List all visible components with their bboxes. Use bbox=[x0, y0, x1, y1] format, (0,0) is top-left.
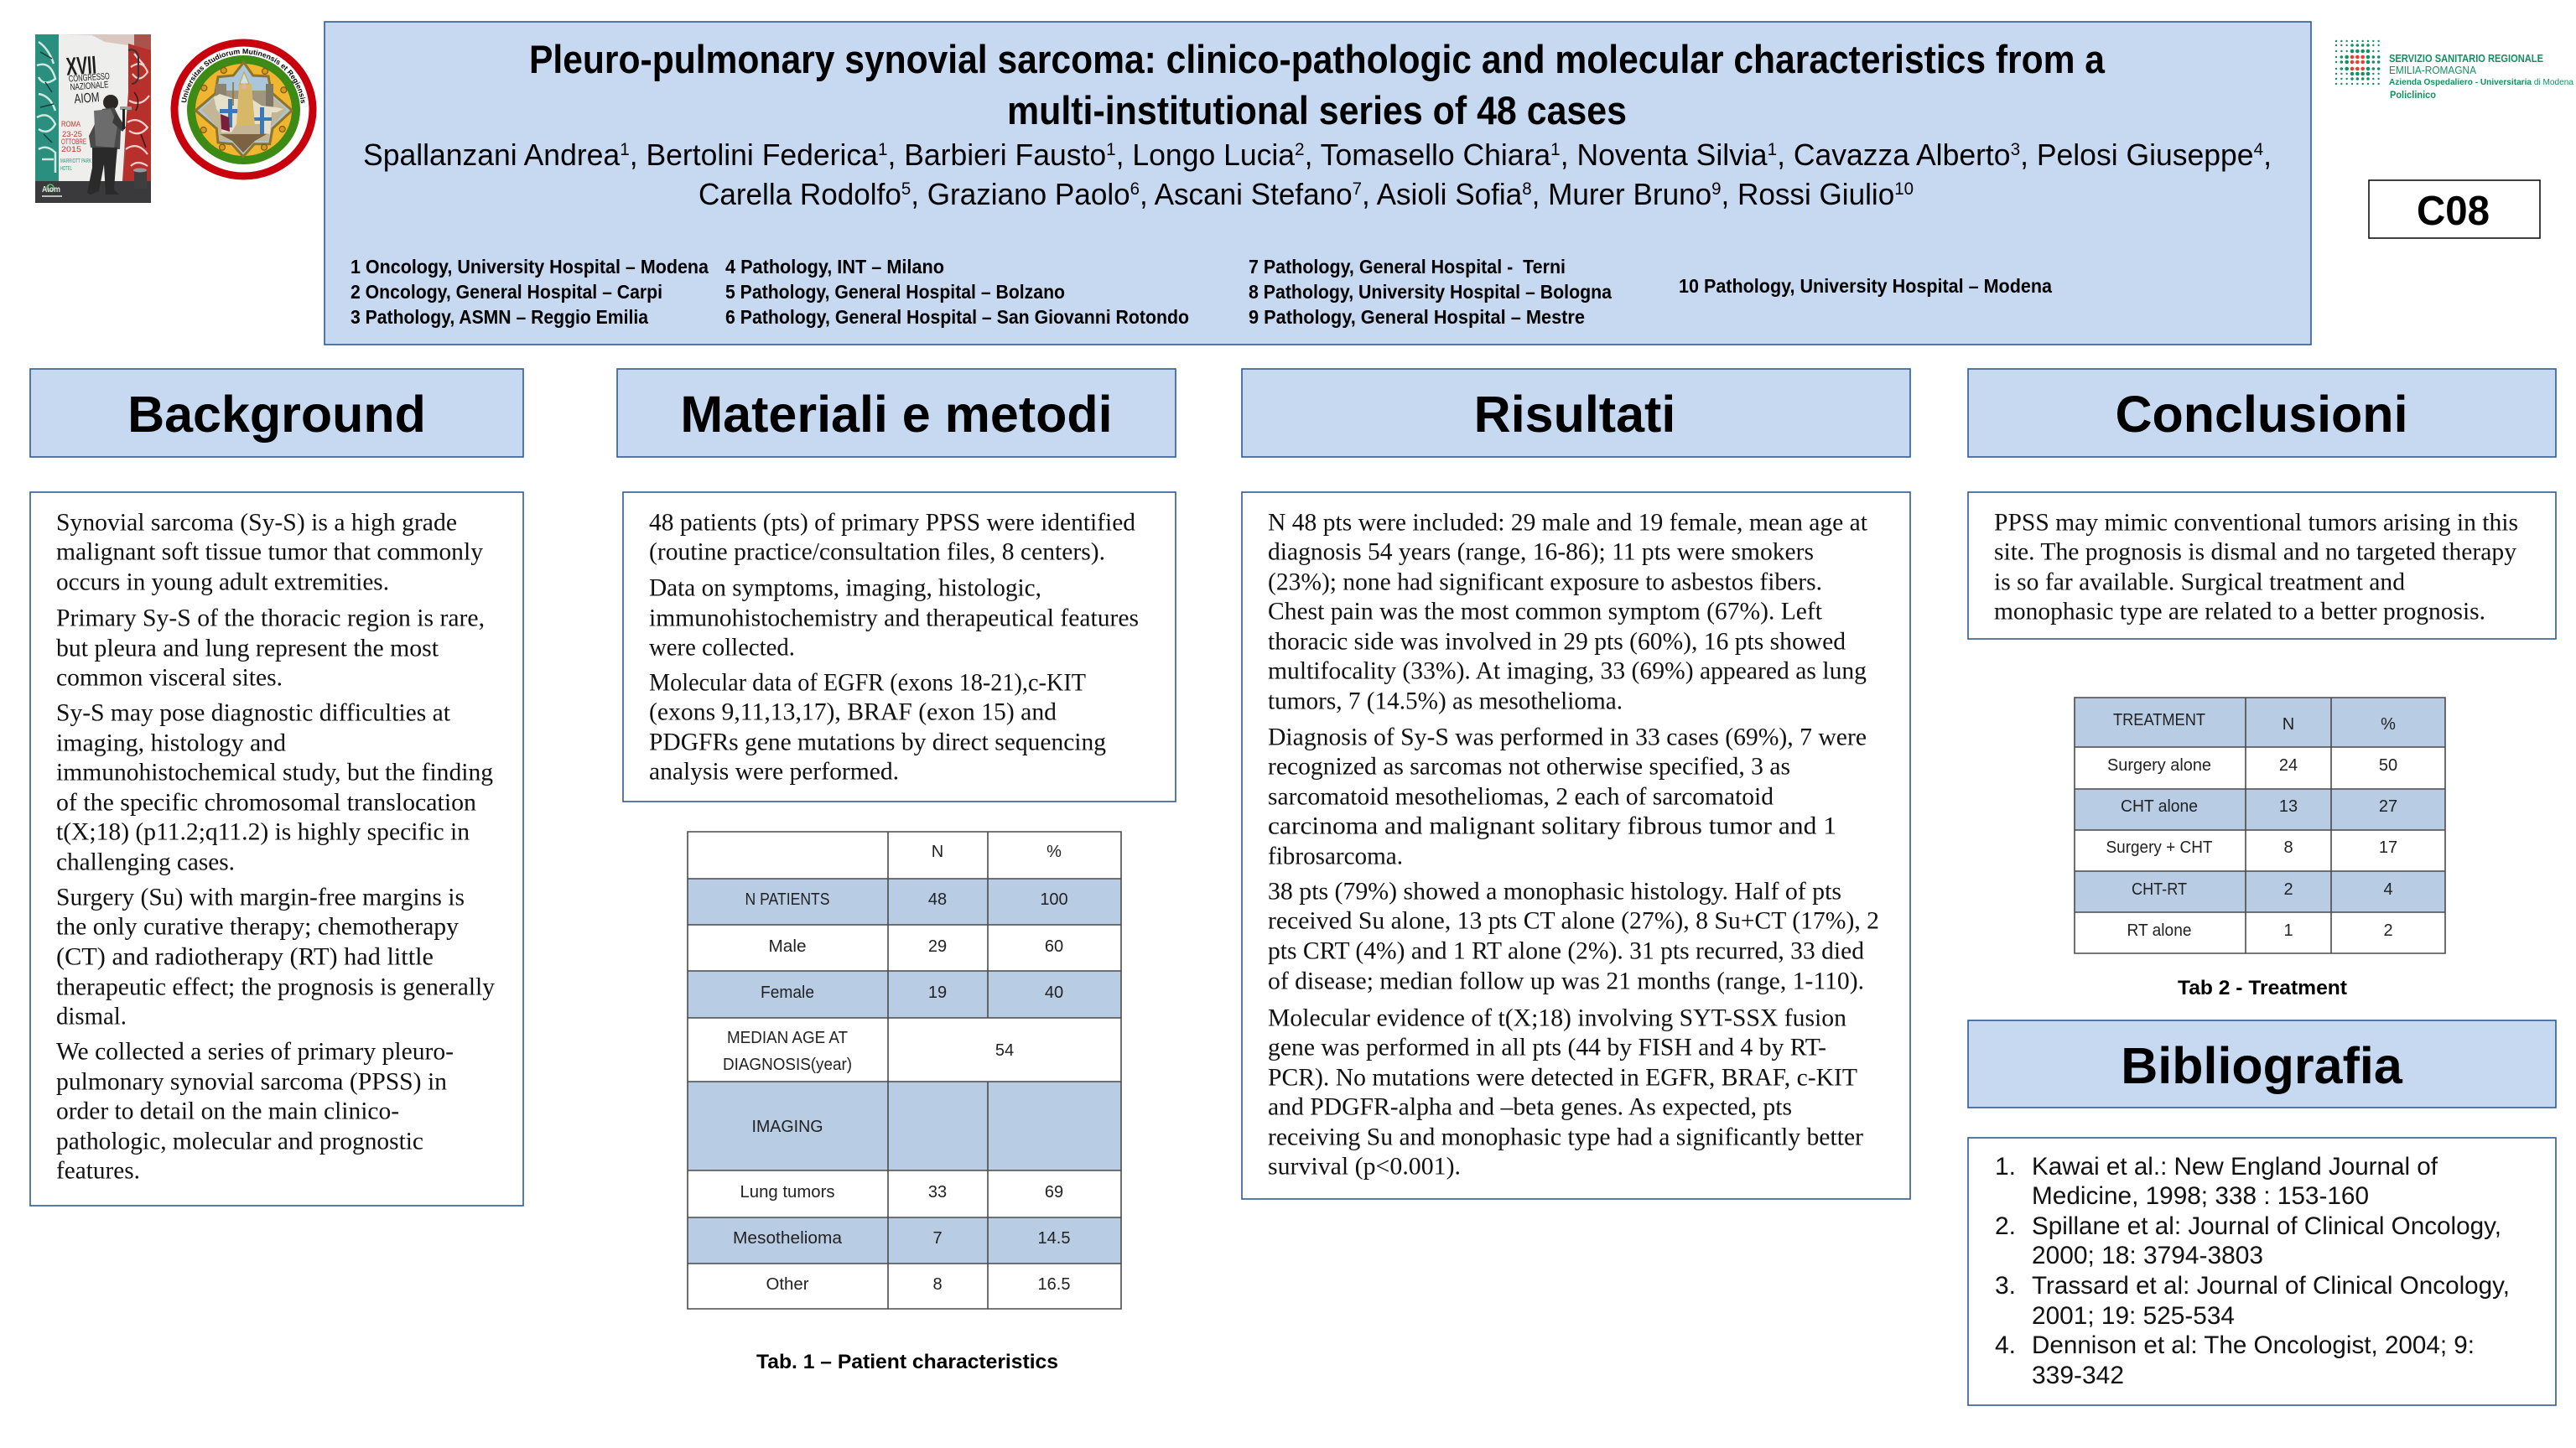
logo: university seal bbox=[171, 39, 317, 179]
heading: Bibliografia: Bibliografia bbox=[2121, 1037, 2403, 1094]
logo: Servizio Sanitario Regionale: Azienda Ospedaliero - Universitaria di Modena bbox=[2389, 77, 2573, 87]
panel: Background text: Primary Sy-S of the thoracic region is rare, bbox=[56, 604, 485, 632]
panel: Risultati text: recognized as sarcomas not otherwise specified, 3 as bbox=[1268, 753, 1790, 780]
authors: 1 bbox=[620, 140, 630, 159]
logo: congress poster: OTTOBRE bbox=[61, 138, 86, 146]
quatrefoil emblem bbox=[195, 62, 292, 157]
table 1: patient characteristics: 7 bbox=[932, 1229, 943, 1248]
affiliations: 4 Pathology, INT – Milano bbox=[725, 256, 944, 278]
panel: Conclusioni text: PPSS may mimic conventional tumors arising in this bbox=[1994, 508, 2518, 537]
panel: Risultati text: Molecular evidence of t(X;18) involving SYT-SSX fusion bbox=[1268, 1004, 1846, 1031]
panel: Materiali e metodi text: were collected. bbox=[649, 634, 795, 661]
panel: Background text bbox=[30, 492, 523, 1206]
table 2: treatment: 2 bbox=[2283, 880, 2293, 899]
authors: , Longo Lucia bbox=[1116, 138, 1296, 172]
panel: Risultati text: sarcomatoid mesotheliomas, 2 each of sarcomatoid bbox=[1268, 783, 1774, 810]
panel: Conclusioni text: site. The prognosis is dismal and no targeted therapy bbox=[1994, 538, 2516, 565]
panel: Bibliografia references: 339-342 bbox=[2032, 1362, 2124, 1389]
panel: Background text: common visceral sites. bbox=[56, 664, 283, 691]
heading: Conclusioni: Conclusioni bbox=[2115, 386, 2408, 443]
table 2: treatment: 2 bbox=[2383, 921, 2393, 940]
logo: congress poster: HOTEL bbox=[60, 166, 72, 172]
table 2: treatment: 50 bbox=[2379, 756, 2397, 775]
panel: Background text: Surgery (Su) with margin-free margins is bbox=[56, 884, 465, 911]
table 1: patient characteristics: 100 bbox=[1040, 890, 1068, 909]
affiliations: 9 Pathology, General Hospital – Mestre bbox=[1249, 306, 1585, 328]
table 1: patient characteristics: Lung tumors bbox=[740, 1183, 835, 1201]
logo: congress poster: 23-25 bbox=[62, 130, 82, 138]
panel: Bibliografia references: Dennison et al: The Oncologist, 2004; 9: bbox=[2032, 1331, 2475, 1359]
panel: Risultati text: of disease; median follow up was 21 months (range, 1-110). bbox=[1268, 968, 1864, 994]
logo: congress poster: NAZIONALE bbox=[70, 80, 109, 93]
logo: congress poster: CONGRESSO bbox=[68, 71, 111, 85]
table 2: treatment: 8 bbox=[2283, 838, 2293, 857]
panel: Background text: We collected a series of primary pleuro- bbox=[56, 1038, 454, 1065]
table 2: treatment: CHT-RT bbox=[2132, 880, 2187, 899]
panel: Background text: therapeutic effect; the prognosis is generally bbox=[56, 973, 495, 1001]
panel: Bibliografia references: 4. bbox=[1995, 1331, 2016, 1359]
panel: Bibliografia references: Medicine, 1998; 338 : 153-160 bbox=[2032, 1182, 2369, 1210]
panel: Bibliografia references: Trassard et al: Journal of Clinical Oncology, bbox=[2032, 1272, 2510, 1300]
panel: Background text: immunohistochemical study, but the finding bbox=[56, 758, 493, 786]
heading: Bibliografia bbox=[1968, 1020, 2556, 1108]
panel: Materiali e metodi text: immunohistochemistry and therapeutical features bbox=[649, 604, 1139, 632]
code box C08 bbox=[2369, 180, 2540, 238]
authors: 1 bbox=[1106, 140, 1116, 159]
panel: Risultati text: Diagnosis of Sy-S was performed in 33 cases (69%), 7 were bbox=[1268, 723, 1867, 751]
panel: Risultati text: pts CRT (4%) and 1 RT alone (2%). 31 pts recurred, 33 died bbox=[1268, 937, 1864, 964]
authors: 5 bbox=[901, 179, 911, 199]
panel: Background text: but pleura and lung represent the most bbox=[56, 634, 439, 662]
authors: , Graziano Paolo bbox=[911, 177, 1130, 211]
table 1: patient characteristics: 54 bbox=[995, 1041, 1014, 1060]
affiliations: 3 Pathology, ASMN – Reggio Emilia bbox=[351, 306, 648, 328]
logo: congress poster: ROMA bbox=[61, 120, 80, 128]
logo: Servizio Sanitario Regionale: Policlinico bbox=[2390, 89, 2436, 101]
authors: 4 bbox=[2254, 140, 2263, 159]
panel: Materiali e metodi text: PDGFRs gene mutations by direct sequencing bbox=[649, 728, 1106, 756]
authors: , Pelosi Giuseppe bbox=[2020, 138, 2254, 172]
panel: Risultati text: (23%); none had significant exposure to asbestos fibers. bbox=[1268, 568, 1822, 595]
panel: Materiali e metodi text bbox=[623, 492, 1176, 802]
logo: university seal: Universitas Studiorum Mutinensis et Regiensis bbox=[181, 49, 305, 104]
table 1: patient characteristics: N PATIENTS bbox=[745, 890, 830, 909]
panel: Bibliografia references: Spillane et al: Journal of Clinical Oncology, bbox=[2032, 1212, 2501, 1240]
authors: , Murer Bruno bbox=[1532, 177, 1711, 211]
table 1: patient characteristics: Female bbox=[761, 983, 814, 1002]
authors: 3 bbox=[2011, 140, 2020, 159]
title: Pleuro-pulmonary synovial sarcoma: clinico-pathologic and molecular characteristics from a bbox=[529, 37, 2106, 81]
panel: Background text: imaging, histology and bbox=[56, 729, 286, 756]
authors: 1 bbox=[1768, 140, 1777, 159]
logo: congress poster: MARRIOTT PARK bbox=[60, 158, 91, 164]
table 1: patient characteristics: 69 bbox=[1045, 1183, 1063, 1201]
panel: Materiali e metodi text: analysis were performed. bbox=[649, 758, 899, 785]
table 2: treatment: 4 bbox=[2383, 880, 2393, 899]
panel: Risultati text: diagnosis 54 years (range, 16-86); 11 pts were smokers bbox=[1268, 538, 1814, 565]
panel: Background text: pathologic, molecular and prognostic bbox=[56, 1127, 423, 1155]
panel: Risultati text: N 48 pts were included: 29 male and 19 female, mean age at bbox=[1268, 508, 1868, 537]
table 2: treatment: N bbox=[2283, 715, 2294, 734]
panel: Background text: of the specific chromosomal translocation bbox=[56, 788, 476, 817]
panel: Risultati text bbox=[1242, 492, 1910, 1199]
authors: , Noventa Silvia bbox=[1561, 138, 1768, 172]
table 1: patient characteristics: Mesothelioma bbox=[733, 1229, 843, 1248]
authors: , Cavazza Alberto bbox=[1777, 138, 2011, 172]
table 1: patient characteristics: 48 bbox=[928, 890, 947, 909]
panel: Background text: Synovial sarcoma (Sy-S) is a high grade bbox=[56, 508, 457, 537]
panel: Risultati text: receiving Su and monophasic type had a significantly better bbox=[1268, 1124, 1863, 1150]
panel: Bibliografia references: 3. bbox=[1995, 1272, 2016, 1300]
panel: Background text: the only curative therapy; chemotherapy bbox=[56, 912, 459, 941]
panel: Background text: pulmonary synovial sarcoma (PPSS) in bbox=[56, 1068, 447, 1095]
heading: Background bbox=[30, 369, 523, 457]
panel: Risultati text: thoracic side was involved in 29 pts (60%), 16 pts showed bbox=[1268, 627, 1846, 656]
authors: 10 bbox=[1894, 179, 1914, 199]
authors: 7 bbox=[1353, 179, 1362, 199]
logo: congress poster: XVII bbox=[65, 51, 97, 81]
affiliations: 5 Pathology, General Hospital – Bolzano bbox=[725, 281, 1065, 303]
panel: Risultati text: 38 pts (79%) showed a monophasic histology. Half of pts bbox=[1268, 877, 1841, 906]
panel: Risultati text: received Su alone, 13 pts CT alone (27%), 8 Su+CT (17%), 2 bbox=[1268, 907, 1879, 934]
authors: , Bertolini Federica bbox=[630, 138, 879, 172]
heading: Risultati bbox=[1242, 369, 1910, 457]
authors: , Ascani Stefano bbox=[1140, 177, 1353, 211]
table 2: treatment: % bbox=[2381, 715, 2396, 734]
table 1: patient characteristics: 14.5 bbox=[1038, 1229, 1070, 1248]
table 2: treatment: 1 bbox=[2283, 921, 2293, 940]
affiliations: 7 Pathology, General Hospital - Terni bbox=[1249, 256, 1566, 278]
authors: 9 bbox=[1711, 179, 1722, 199]
table 2: treatment: RT alone bbox=[2127, 921, 2192, 940]
table 2: treatment: Surgery + CHT bbox=[2106, 838, 2212, 857]
authors bbox=[363, 138, 2272, 211]
panel: Bibliografia references: 2001; 19: 525-534 bbox=[2032, 1302, 2235, 1330]
panel: Bibliografia references: Kawai et al.: New England Journal of bbox=[2032, 1153, 2438, 1181]
authors: Carella Rodolfo bbox=[699, 177, 906, 211]
table 1 caption: Tab. 1 – Patient characteristics bbox=[756, 1351, 1058, 1373]
panel: Background text: (CT) and radiotherapy (RT) had little bbox=[56, 942, 434, 971]
table 1: patient characteristics: Male bbox=[768, 937, 807, 956]
authors: 1 bbox=[1550, 140, 1561, 159]
authors: 1 bbox=[878, 140, 887, 159]
heading: Materiali e metodi bbox=[617, 369, 1176, 457]
logo: congress poster: Aiom bbox=[42, 185, 60, 195]
table 2: treatment: 27 bbox=[2379, 797, 2397, 816]
panel: Risultati text: gene was performed in all pts (44 by FISH and 4 by RT- bbox=[1268, 1033, 1826, 1061]
logo: congress poster: 2015 bbox=[61, 145, 81, 153]
authors: , Tomasello Chiara bbox=[1305, 138, 1551, 172]
logo: Servizio Sanitario Regionale: SERVIZIO SANITARIO REGIONALE bbox=[2389, 53, 2543, 65]
authors: , bbox=[2263, 138, 2272, 172]
panel: Risultati text: multifocality (33%). At imaging, 33 (69%) appeared as lung bbox=[1268, 657, 1867, 684]
panel: Conclusioni text: monophasic type are related to a better prognosis. bbox=[1994, 597, 2485, 625]
authors: , Barbieri Fausto bbox=[887, 138, 1106, 172]
affiliations: 10 Pathology, University Hospital – Modena bbox=[1679, 275, 2052, 297]
authors: , Asioli Sofia bbox=[1362, 177, 1523, 211]
title bbox=[529, 37, 2106, 132]
affiliations bbox=[351, 256, 2052, 328]
logo: congress poster: AIOM bbox=[74, 91, 100, 106]
authors: 8 bbox=[1522, 179, 1532, 199]
table 1: patient characteristics: 40 bbox=[1045, 983, 1063, 1002]
heading: Materiali e metodi: Materiali e metodi bbox=[680, 386, 1113, 443]
authors: , Rossi Giulio bbox=[1722, 177, 1894, 211]
affiliations: 1 Oncology, University Hospital – Modena bbox=[351, 256, 709, 278]
table 2 caption: Tab 2 - Treatment bbox=[2178, 977, 2347, 999]
table 1: patient characteristics: 16.5 bbox=[1038, 1275, 1070, 1294]
table 2: treatment: 17 bbox=[2379, 838, 2397, 857]
table 2: treatment: CHT alone bbox=[2121, 797, 2198, 816]
table 1: patient characteristics: N bbox=[932, 843, 943, 861]
panel: Bibliografia references bbox=[1968, 1138, 2556, 1405]
table 1: patient characteristics: IMAGING bbox=[751, 1118, 823, 1136]
heading: Background: Background bbox=[127, 386, 426, 443]
panel: Bibliografia references: 2. bbox=[1995, 1212, 2016, 1240]
affiliations: 6 Pathology, General Hospital – San Giovanni Rotondo bbox=[725, 306, 1189, 328]
panel: Background text: challenging cases. bbox=[56, 849, 235, 875]
table 1: patient characteristics: 33 bbox=[928, 1183, 947, 1201]
table 1: patient characteristics: 29 bbox=[928, 937, 947, 956]
table 1: patient characteristics: % bbox=[1046, 843, 1062, 861]
authors: 2 bbox=[1295, 140, 1305, 159]
panel: Materiali e metodi text: (routine practice/consultation files, 8 centers). bbox=[649, 538, 1105, 565]
table 1: patient characteristics: 8 bbox=[932, 1275, 943, 1294]
authors: 6 bbox=[1130, 179, 1140, 199]
panel: Risultati text: tumors, 7 (14.5%) as mesothelioma. bbox=[1268, 688, 1623, 714]
panel: Conclusioni text: is so far available. Surgical treatment and bbox=[1994, 568, 2405, 595]
table 1: patient characteristics: Other bbox=[766, 1275, 809, 1294]
panel: Risultati text: survival (p<0.001). bbox=[1268, 1152, 1461, 1181]
panel: Risultati text: fibrosarcoma. bbox=[1268, 842, 1403, 870]
table 1: patient characteristics: 60 bbox=[1045, 937, 1063, 956]
table 2: treatment: TREATMENT bbox=[2113, 711, 2205, 729]
panel: Risultati text: Chest pain was the most common symptom (67%). Left bbox=[1268, 597, 1823, 625]
panel: Bibliografia references: 2000; 18: 3794-3803 bbox=[2032, 1242, 2263, 1269]
panel: Background text: occurs in young adult extremities. bbox=[56, 568, 389, 595]
heading: Conclusioni bbox=[1968, 369, 2556, 457]
panel: Bibliografia references: 1. bbox=[1995, 1153, 2016, 1181]
table 2: treatment: Surgery alone bbox=[2107, 756, 2211, 775]
panel: Materiali e metodi text: (exons 9,11,13,17), BRAF (exon 15) and bbox=[649, 698, 1057, 726]
logo: Servizio Sanitario Regionale: EMILIA-ROMAGNA bbox=[2389, 65, 2477, 76]
logo: Servizio Sanitario Regionale bbox=[2336, 41, 2573, 101]
title: multi-institutional series of 48 cases bbox=[1007, 88, 1627, 132]
panel: Conclusioni text bbox=[1968, 492, 2556, 639]
logo: congress poster bbox=[35, 34, 151, 203]
table 1: patient characteristics: MEDIAN AGE AT bbox=[727, 1029, 848, 1047]
heading: Risultati: Risultati bbox=[1474, 386, 1675, 443]
panel: Background text: order to detail on the main clinico- bbox=[56, 1097, 399, 1125]
table 2: treatment bbox=[2075, 698, 2445, 953]
affiliations: 2 Oncology, General Hospital – Carpi bbox=[351, 281, 662, 303]
panel: Materiali e metodi text: Molecular data of EGFR (exons 18-21),c-KIT bbox=[649, 669, 1086, 696]
header panel bbox=[325, 22, 2311, 345]
table 1: patient characteristics bbox=[688, 832, 1121, 1309]
authors: Spallanzani Andrea bbox=[363, 138, 623, 172]
panel: Risultati text: and PDGFR-alpha and –beta genes. As expected, pts bbox=[1268, 1093, 1792, 1120]
panel: Materiali e metodi text: 48 patients (pts) of primary PPSS were identified bbox=[649, 508, 1135, 537]
table 1: patient characteristics: DIAGNOSIS(year) bbox=[723, 1056, 852, 1074]
panel: Background text: t(X;18) (p11.2;q11.2) is highly specific in bbox=[56, 818, 470, 845]
table 2: treatment: 13 bbox=[2279, 797, 2298, 816]
affiliations: 8 Pathology, University Hospital – Bologna bbox=[1249, 281, 1612, 303]
table 2: treatment: 24 bbox=[2279, 756, 2298, 775]
table 1: patient characteristics: 19 bbox=[928, 983, 947, 1002]
panel: Materiali e metodi text: Data on symptoms, imaging, histologic, bbox=[649, 573, 1041, 602]
panel: Risultati text: carcinoma and malignant solitary fibrous tumor and 1 bbox=[1268, 812, 1836, 840]
panel: Background text: malignant soft tissue tumor that commonly bbox=[56, 538, 483, 565]
code box C08: C08 bbox=[2417, 189, 2490, 234]
panel: Background text: dismal. bbox=[56, 1003, 127, 1030]
panel: Background text: features. bbox=[56, 1157, 140, 1184]
panel: Risultati text: PCR). No mutations were detected in EGFR, BRAF, c-KIT bbox=[1268, 1063, 1857, 1092]
panel: Background text: Sy-S may pose diagnostic difficulties at bbox=[56, 699, 451, 726]
